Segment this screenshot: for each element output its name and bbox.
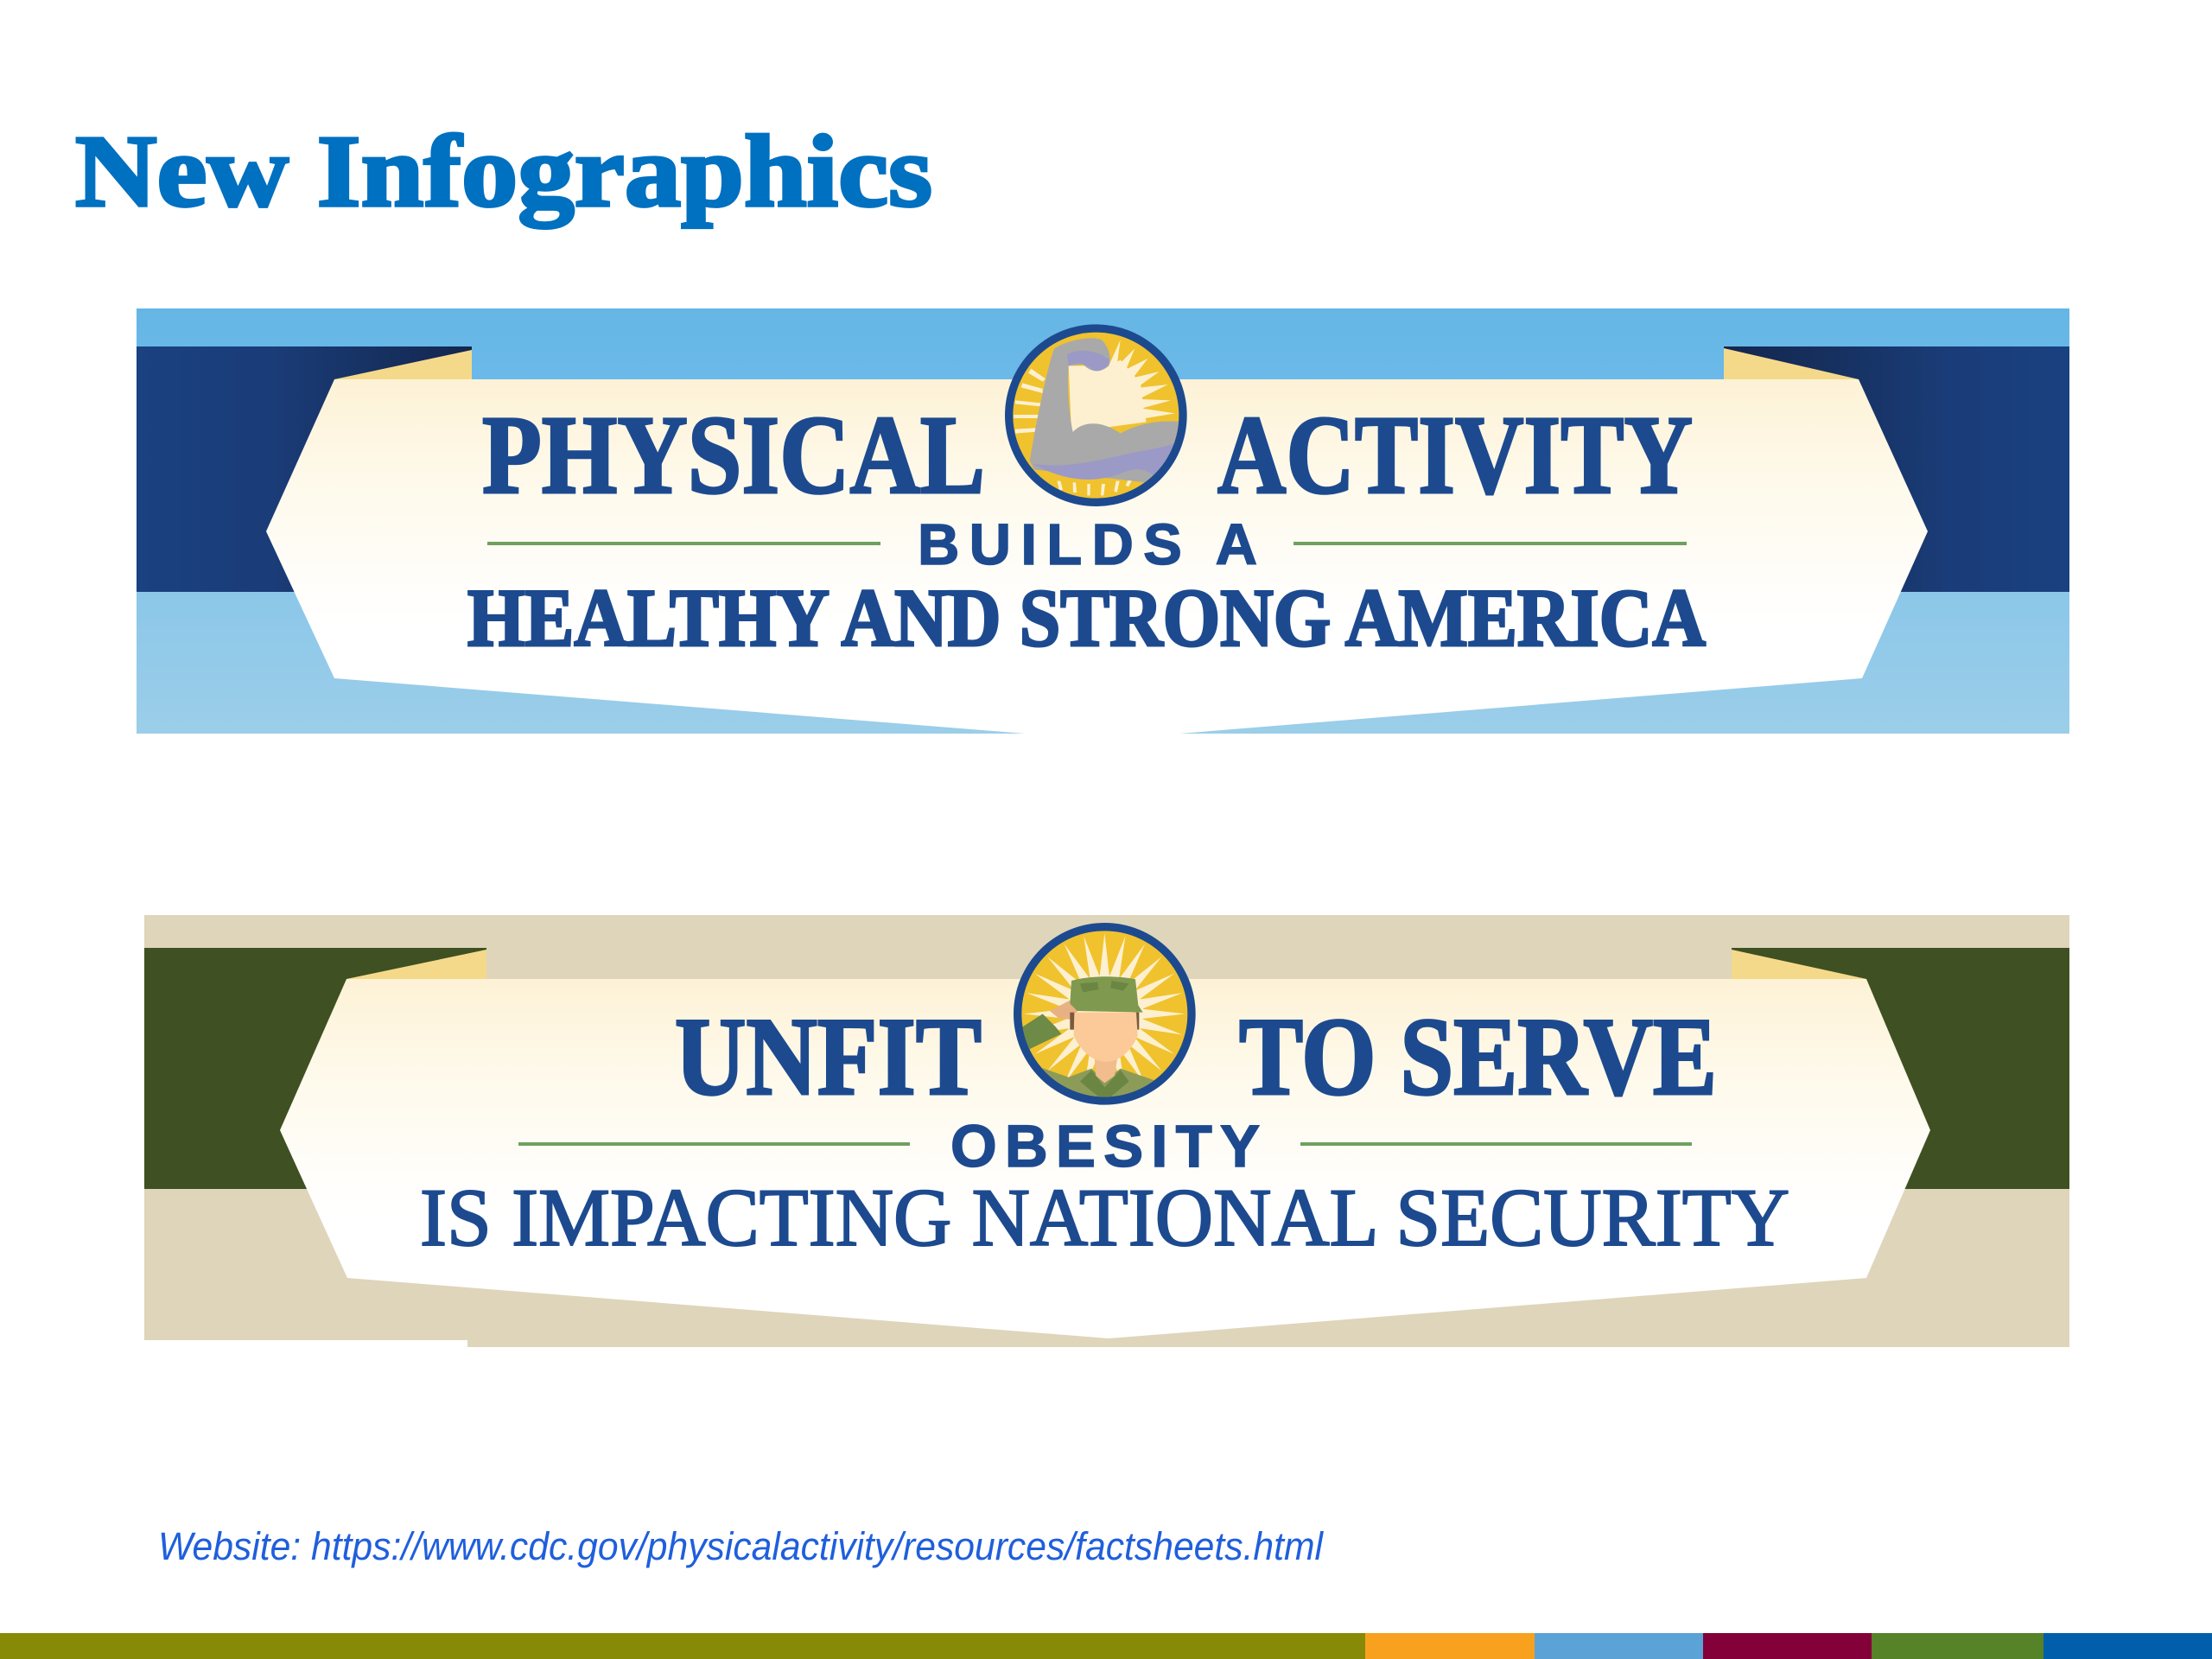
left divider bbox=[518, 1142, 910, 1146]
title: New Infographics bbox=[75, 114, 932, 228]
bottom colour bar bbox=[0, 1633, 2212, 1659]
banner: unfit to serve bbox=[144, 915, 2069, 1348]
heading: physical: PHYSICAL bbox=[482, 393, 985, 518]
heading: unfit: UNFIT bbox=[675, 995, 982, 1118]
right divider bbox=[1300, 1142, 1692, 1146]
left ribbon fold bbox=[334, 350, 472, 380]
banner: physical activity bbox=[137, 308, 2069, 734]
icon: flexed arm bbox=[1005, 324, 1187, 506]
heading: to serve: TO SERVE bbox=[1239, 995, 1717, 1118]
heading: is impacting national security: IS IMPACTING NATIONAL SECURITY bbox=[420, 1172, 1789, 1263]
right ribbon fold bbox=[1732, 950, 1866, 980]
heading: healthy and strong america: HEALTHY AND STRONG AMERICA bbox=[467, 572, 1706, 664]
white notch bbox=[144, 1340, 467, 1348]
heading: activity: ACTIVITY bbox=[1217, 393, 1693, 518]
left divider bbox=[487, 542, 880, 545]
right ribbon fold bbox=[1724, 348, 1859, 380]
subheading: builds a: BUILDS A bbox=[918, 512, 1257, 577]
subheading: obesity: OBESITY bbox=[950, 1113, 1260, 1179]
ribbon bbox=[266, 379, 1928, 734]
icon: saluting soldier bbox=[1014, 923, 1196, 1113]
right divider bbox=[1294, 542, 1687, 545]
website link text: Website: https://www.cdc.gov/physicalactivity/resources/factsheets.html bbox=[158, 1524, 1325, 1568]
left ribbon fold bbox=[346, 950, 486, 980]
ribbon bbox=[280, 979, 1930, 1338]
